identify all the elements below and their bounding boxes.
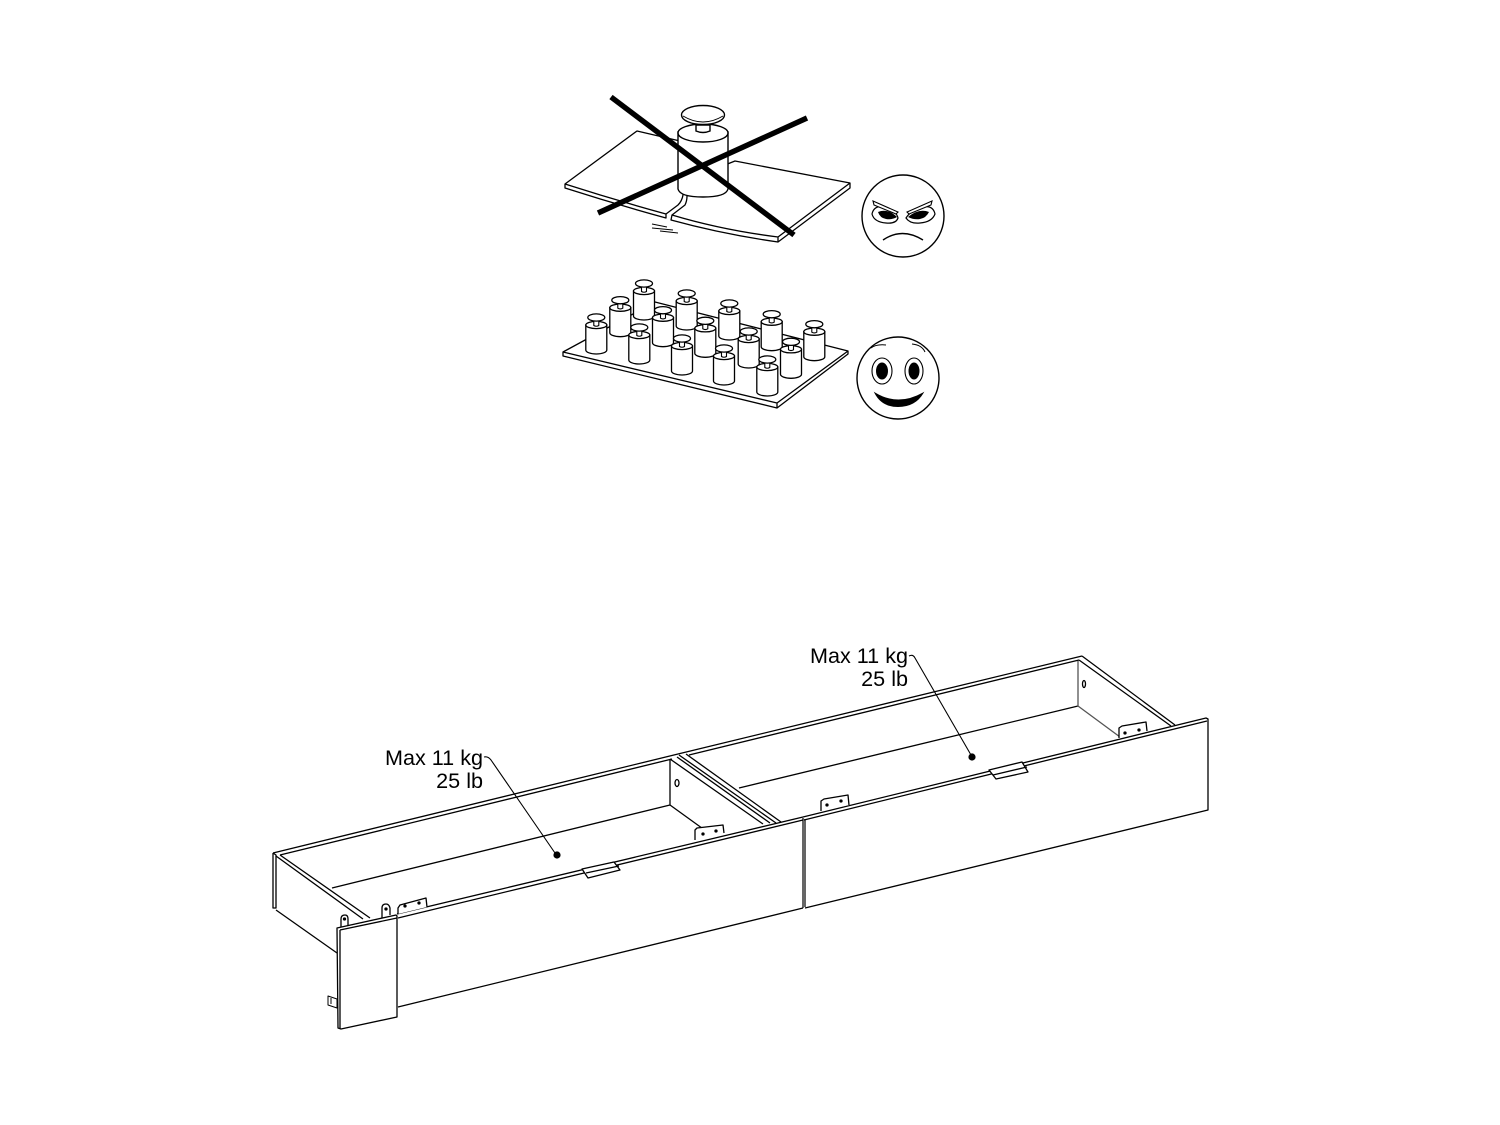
many small weights xyxy=(586,280,825,396)
shelf board xyxy=(563,302,848,408)
drawer carcass back rails xyxy=(273,656,1082,855)
callout: right drawer load: 25 lb xyxy=(861,666,908,691)
broken shelf xyxy=(565,131,850,242)
icon: happy face xyxy=(857,337,939,419)
handles xyxy=(582,762,1028,878)
hinges xyxy=(398,722,1147,914)
callout: right drawer load xyxy=(810,643,976,761)
panel: overloaded shelf (wrong) xyxy=(565,97,944,257)
panel: under-bed drawers xyxy=(273,643,1208,1029)
callout: right drawer load: Max 11 kg xyxy=(810,643,908,668)
left drawer front xyxy=(397,817,803,1007)
centre divider xyxy=(670,754,781,831)
left end panel xyxy=(273,853,370,953)
callout: left drawer load: 25 lb xyxy=(436,768,483,793)
callout: left drawer load xyxy=(385,745,561,859)
right end panel xyxy=(1078,656,1175,737)
right drawer front xyxy=(803,718,1208,908)
panel: evenly distributed weights (right) xyxy=(563,280,939,419)
back floor lines xyxy=(332,706,1078,888)
icon: angry face xyxy=(862,175,944,257)
callout: left drawer load: Max 11 kg xyxy=(385,745,483,770)
single heavy weight xyxy=(678,106,728,197)
cross-out mark xyxy=(598,97,807,235)
end cap panel with tabs xyxy=(328,904,397,1029)
